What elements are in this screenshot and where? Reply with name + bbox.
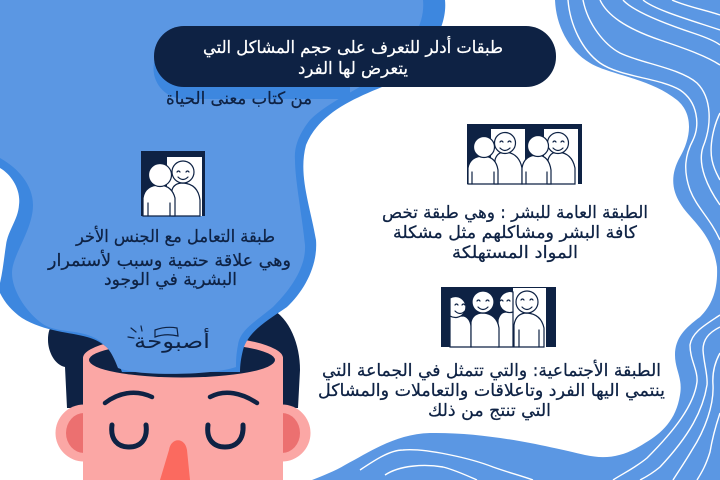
decorative blue wave: right and bottom [312,0,720,480]
blue thought shape: fill [0,0,423,374]
character: eyebrows [105,393,257,403]
text: opposite sex layer: وهي علاقة حتمية وسبب لأستمرار [47,250,291,271]
icon: two people [141,151,205,216]
subtitle: book source: من كتاب معنى الحياة [166,89,312,109]
character: left ear [56,404,112,462]
text: social layer: ينتمي اليها الفرد وتاعلاقات والتعاملات والمشاكل [318,381,665,401]
text: general human layer: كافة البشر ومشاكلهم مثل مشكلة [393,223,638,243]
icon: social group [441,287,556,347]
character: right ear [254,404,310,462]
logo: أصبوحة [134,328,210,353]
text: social layer [318,360,665,421]
character: head [83,335,283,480]
title pill shadow [154,38,350,99]
icon: many people (humanity) [467,124,582,184]
title pill [154,26,556,87]
text: general human layer: المواد المستهلكة [452,243,578,263]
character: nose [160,440,190,480]
text: opposite sex layer [47,226,291,290]
title pill: طبقات أدلر للتعرف على حجم المشاكل التي [203,36,503,58]
logo [128,326,210,353]
text: social layer: التي تنتج من ذلك [428,401,551,421]
text: opposite sex layer: البشرية في الوجود [104,270,237,290]
text: general human layer: الطبقة العامة للبشر : وهي طبقة تخص [382,203,648,223]
text: opposite sex layer: طبقة التعامل مع الجنس الأخر [75,226,275,247]
character: closed eyes [112,425,243,447]
text: social layer: الطبقة الأجتماعية: والتي تتمثل في الجماعة التي [322,360,661,381]
character: hair [48,308,300,408]
title pill: يتعرض لها الفرد [298,59,408,79]
blue thought shape: border [0,0,445,372]
text: general human layer [382,203,648,263]
